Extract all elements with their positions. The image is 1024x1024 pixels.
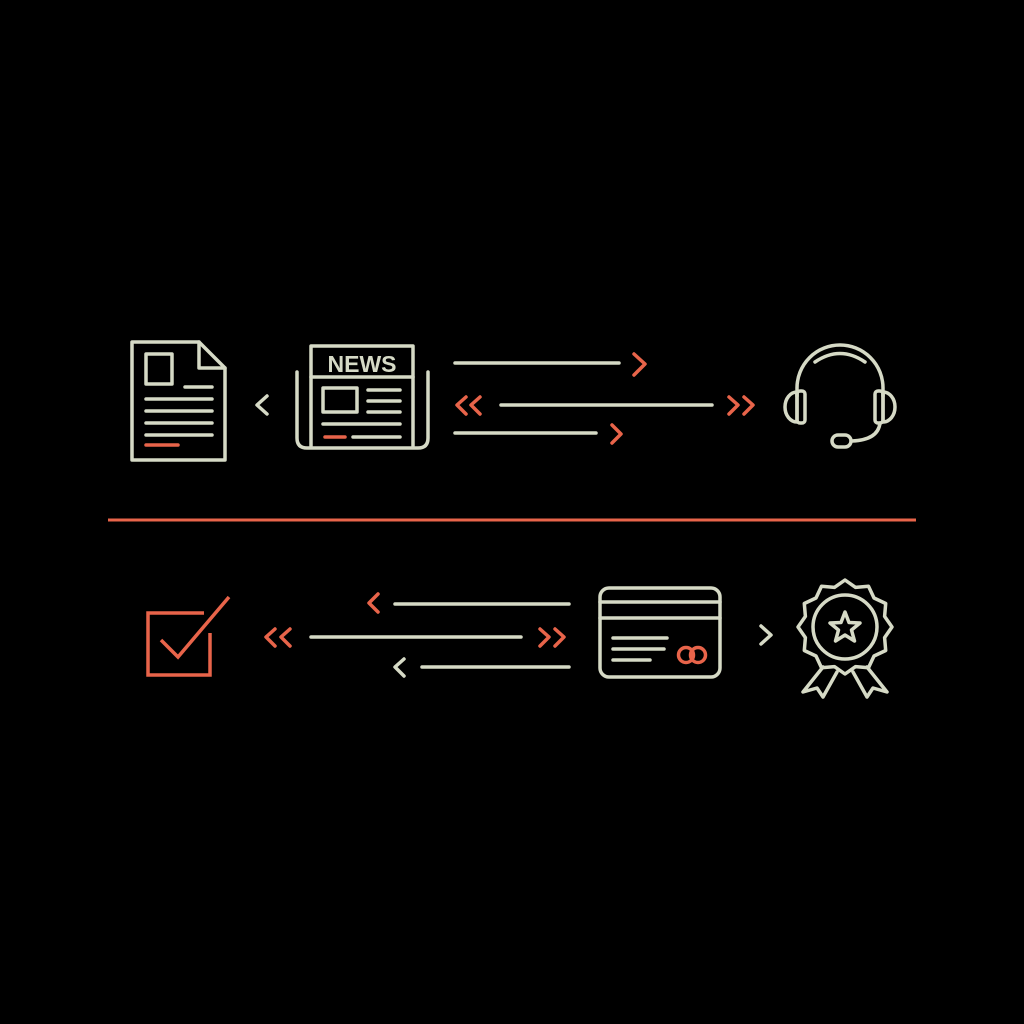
icon: newspaper — [297, 346, 428, 448]
icon: credit card — [600, 588, 720, 677]
arrow: left chevron — [257, 396, 267, 414]
icon: award badge — [798, 580, 892, 697]
icon: document — [132, 342, 225, 460]
icon: checkbox — [148, 597, 229, 675]
arrows: top flow lines — [455, 354, 753, 443]
arrow: right chevron — [761, 626, 771, 644]
icon: headset — [785, 345, 895, 447]
text: NEWS: NEWS — [328, 351, 396, 377]
divider — [108, 518, 916, 522]
arrows: bottom flow lines — [266, 594, 569, 676]
